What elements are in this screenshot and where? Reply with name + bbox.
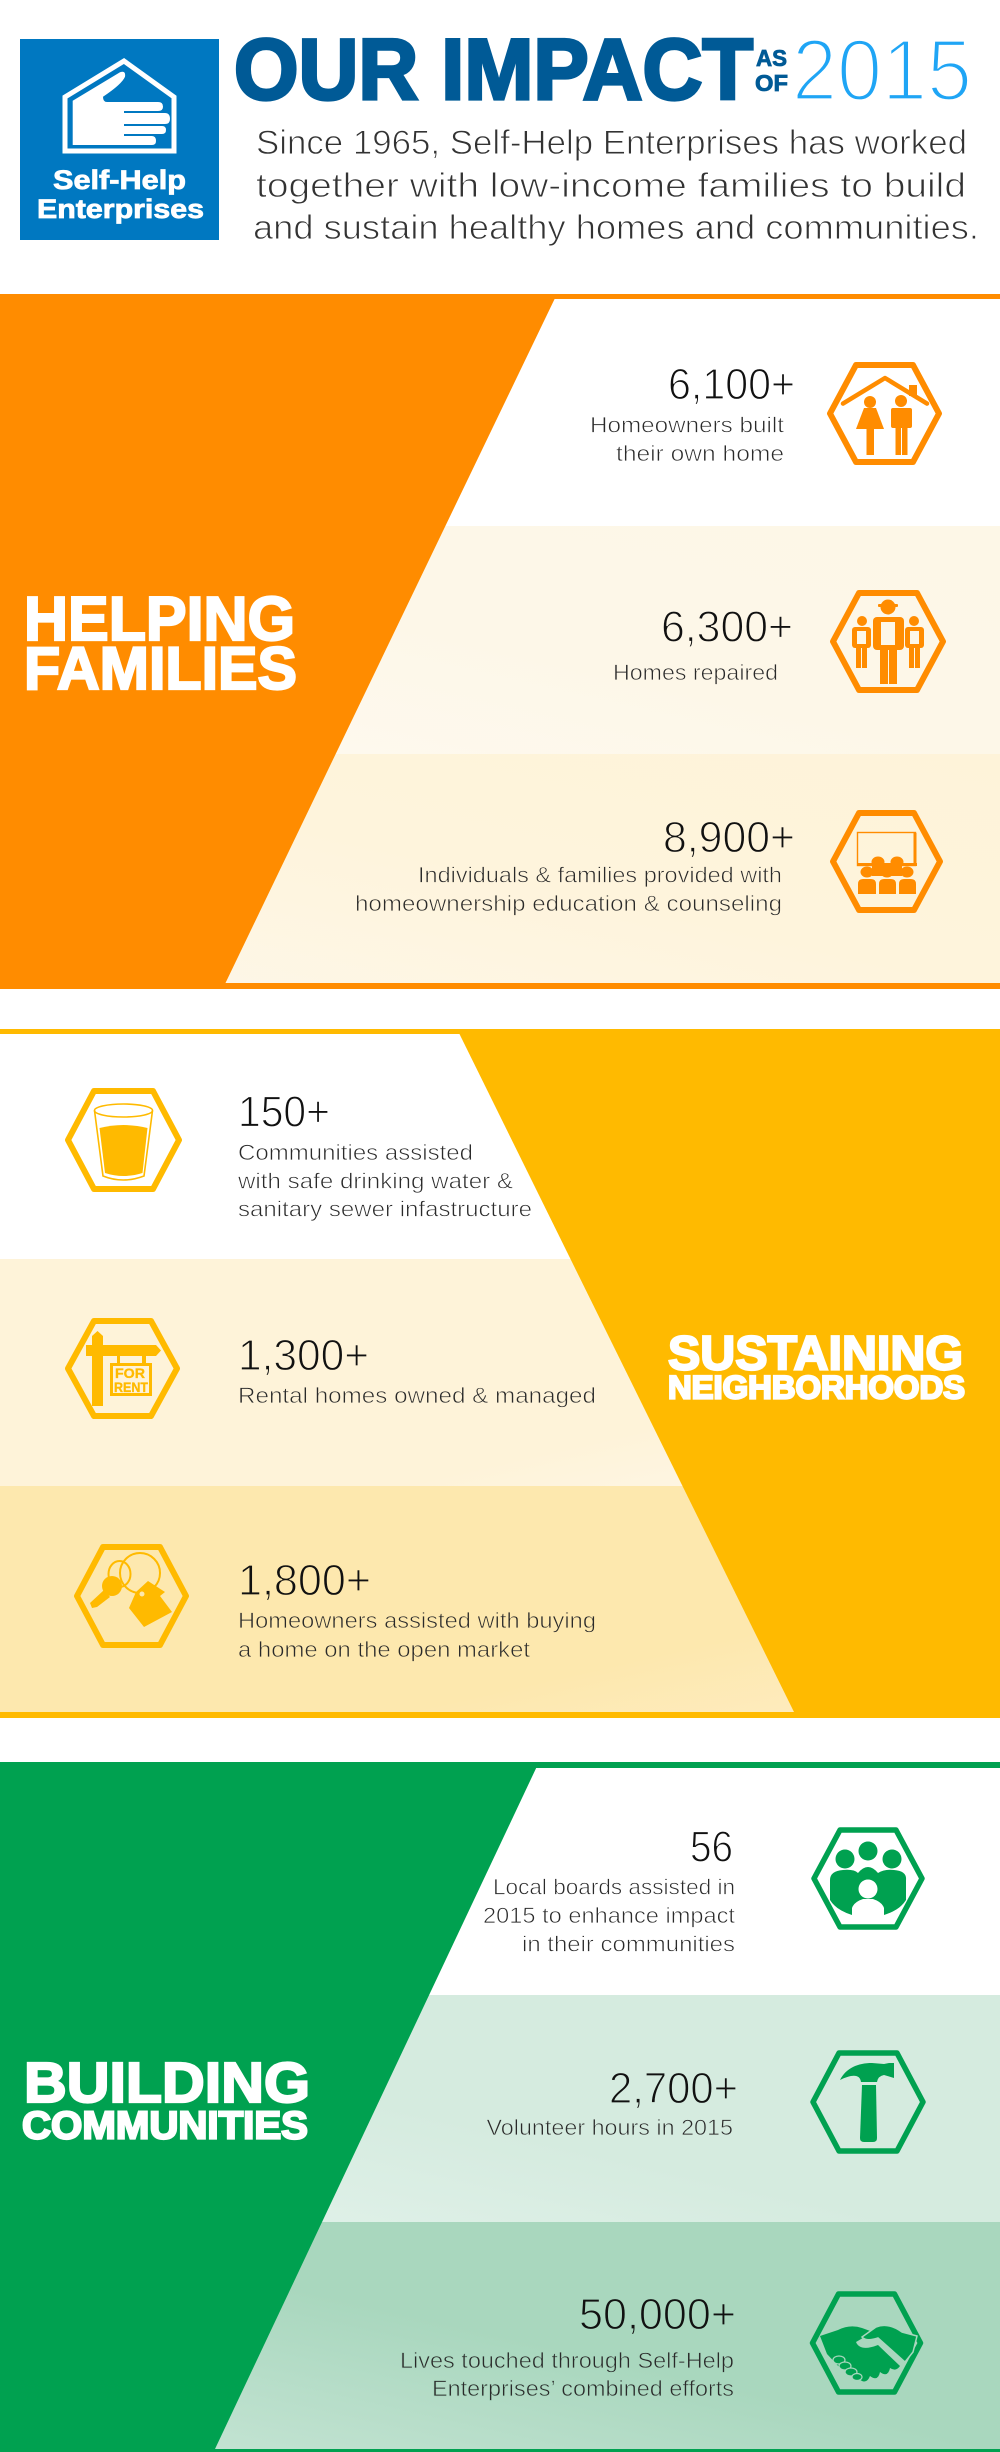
logo	[20, 39, 219, 240]
stat: rental homes	[238, 1331, 596, 1408]
stat: lives touched	[400, 2290, 736, 2401]
icon: hammer	[813, 2053, 923, 2151]
icon: classroom	[833, 813, 940, 910]
icon: keys	[77, 1547, 186, 1645]
stat: lives touched: 50,000+	[579, 2290, 736, 2339]
stat: homes repaired	[613, 602, 793, 685]
stat: communities assisted	[237, 1088, 532, 1222]
stat: local boards: in their communities	[522, 1932, 735, 1956]
intro text: Since 1965, Self-Help Enterprises has worked	[256, 124, 967, 162]
stat: communities assisted: with safe drinking water &	[237, 1168, 513, 1194]
header	[20, 22, 979, 247]
stat: education and counseling: homeownership education & counseling	[355, 891, 782, 916]
stat: volunteer hours: 2,700+	[609, 2064, 738, 2113]
stat: lives touched: Lives touched through Self-Help	[400, 2348, 734, 2373]
stat: education and counseling: Individuals & families provided with	[418, 862, 782, 888]
stat: volunteer hours	[486, 2064, 738, 2140]
heading: sustaining neighborhoods: NEIGHBORHOODS	[668, 1370, 965, 1406]
stat: homebuyers assisted: Homeowners assisted with buying	[238, 1608, 596, 1633]
stat: communities assisted: sanitary sewer infastructure	[238, 1196, 532, 1222]
icon: group of people	[814, 1830, 922, 1927]
panel: helping families	[0, 294, 1000, 989]
stat: homebuyers assisted: a home on the open market	[238, 1637, 530, 1662]
icon: for rent sign	[68, 1321, 177, 1416]
stat: education and counseling	[355, 813, 795, 916]
panel: building communities	[0, 1762, 1000, 2452]
title: AS	[756, 45, 787, 71]
heading: helping families	[24, 585, 297, 702]
icon: glass of water	[68, 1091, 179, 1189]
title: 2015	[792, 22, 972, 119]
stat: homebuyers assisted	[238, 1556, 596, 1662]
heading: building communities	[22, 2051, 310, 2148]
stat: lives touched: Enterprises’ combined efforts	[432, 2376, 734, 2401]
panel: sustaining neighborhoods	[0, 1029, 1000, 1718]
stat: local boards	[483, 1822, 735, 1956]
icon: workers	[833, 593, 943, 690]
intro text: and sustain healthy homes and communities.	[253, 209, 979, 247]
stat: homes repaired: Homes repaired	[613, 660, 778, 685]
title: OUR IMPACT	[234, 22, 753, 118]
heading: sustaining neighborhoods: SUSTAINING	[668, 1328, 963, 1380]
stat: education and counseling: 8,900+	[663, 813, 795, 862]
heading: helping families: HELPING	[24, 585, 295, 654]
stat: communities assisted: 150+	[238, 1088, 330, 1136]
logo: Self-Help	[53, 165, 186, 195]
stat: local boards: Local boards assisted in	[493, 1874, 735, 1900]
stat: homeowners built: Homeowners built	[590, 412, 784, 438]
intro text	[253, 124, 979, 247]
heading: sustaining neighborhoods	[668, 1328, 965, 1406]
icon: handshake	[812, 2294, 920, 2392]
heading: building communities: COMMUNITIES	[22, 2104, 308, 2148]
stat: homeowners built: 6,100+	[668, 360, 795, 409]
title: OF	[755, 70, 788, 96]
icon: couple under roof	[830, 365, 939, 462]
stat: rental homes: Rental homes owned & managed	[238, 1383, 596, 1408]
stat: homes repaired: 6,300+	[661, 602, 793, 652]
stat: homeowners built: their own home	[616, 441, 784, 466]
stat: homeowners built	[590, 360, 795, 466]
stat: communities assisted: Communities assisted	[238, 1140, 473, 1165]
heading: helping families: FAMILIES	[24, 635, 297, 702]
logo: Enterprises	[37, 194, 204, 224]
stat: rental homes: 1,300+	[238, 1331, 369, 1380]
stat: local boards: 56	[690, 1822, 733, 1872]
stat: volunteer hours: Volunteer hours in 2015	[486, 2115, 733, 2140]
icon: for rent sign: FOR	[115, 1366, 145, 1381]
heading: building communities: BUILDING	[24, 2051, 310, 2115]
icon: for rent sign: RENT	[114, 1380, 149, 1395]
stat: local boards: 2015 to enhance impact	[483, 1903, 735, 1928]
stat: homebuyers assisted: 1,800+	[238, 1556, 371, 1605]
intro text: together with low-income families to build	[256, 167, 966, 205]
